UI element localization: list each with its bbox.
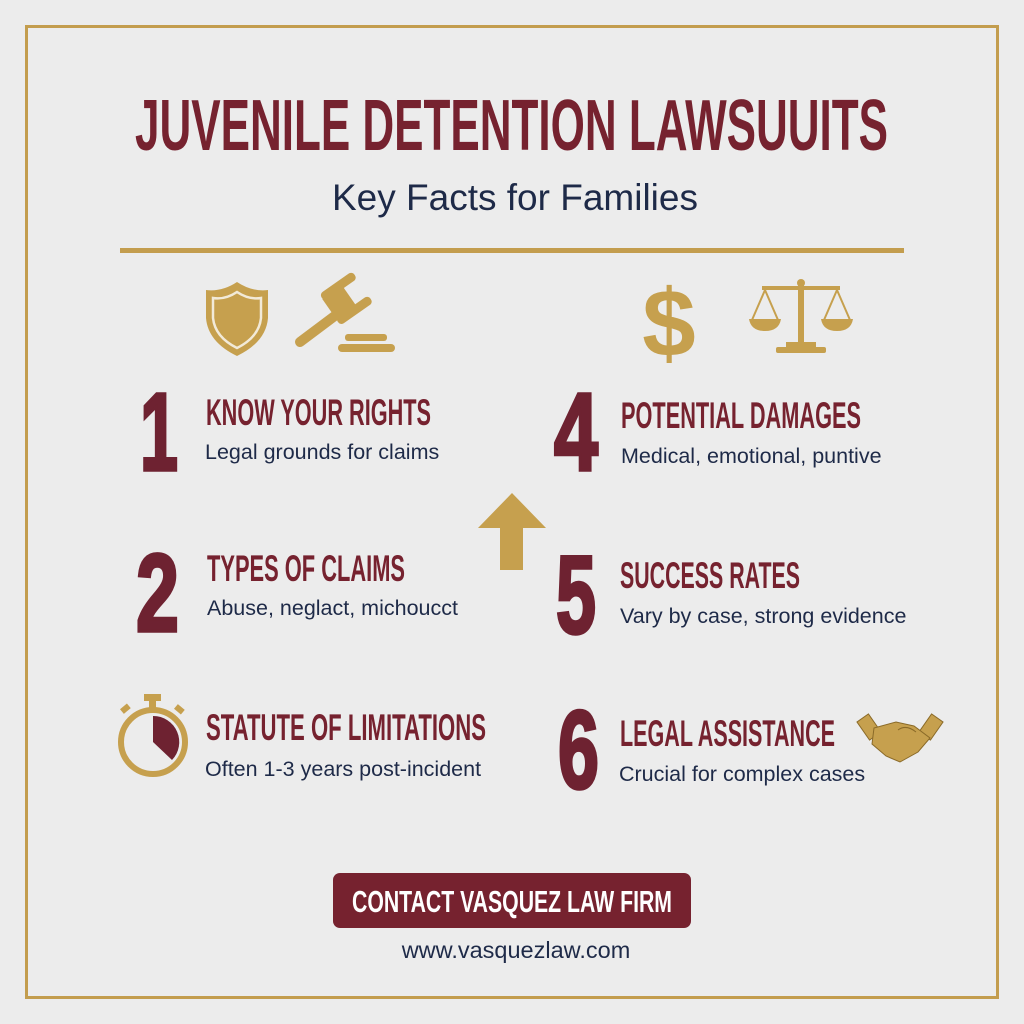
- item 6: 6: [558, 689, 599, 812]
- item 2: TYPES OF CLAIMS: [207, 548, 405, 589]
- subtitle: Key Facts for Families: [332, 177, 698, 218]
- url: www.vasquezlaw.com: [401, 937, 630, 963]
- item 2: [136, 532, 458, 655]
- item 3: STATUTE OF LIMITATIONS: [206, 707, 486, 748]
- item 5: Vary by case, strong evidence: [620, 604, 906, 628]
- item 5: 5: [556, 534, 596, 657]
- item 5: SUCCESS RATES: [620, 555, 800, 596]
- item 5: [556, 534, 906, 657]
- item 4: 4: [554, 371, 598, 494]
- gold divider: [120, 248, 904, 253]
- item 4: POTENTIAL DAMAGES: [621, 395, 861, 436]
- item 6: [558, 689, 943, 812]
- button: contact: [333, 873, 691, 928]
- item 4: [554, 371, 882, 494]
- icon: gavel: [300, 271, 395, 352]
- icon: scales: [749, 279, 853, 353]
- icon: handshake: [857, 714, 943, 762]
- item 2: Abuse, neglact, michoucct: [207, 596, 458, 620]
- arrow: up: [478, 493, 546, 570]
- item 1: Legal grounds for claims: [205, 440, 439, 464]
- item 1: KNOW YOUR RIGHTS: [206, 392, 431, 433]
- item 6: Crucial for complex cases: [619, 762, 865, 786]
- icon: shield: [206, 282, 268, 356]
- icon: dollar: $: [642, 270, 696, 377]
- item 6: LEGAL ASSISTANCE: [620, 713, 835, 754]
- button: contact: CONTACT VASQUEZ LAW FIRM: [352, 884, 672, 919]
- item 3: [120, 694, 486, 781]
- item 3: Often 1-3 years post-incident: [205, 757, 481, 781]
- item 1: 1: [140, 371, 178, 494]
- item 2: 2: [136, 532, 179, 655]
- item 1: [140, 371, 439, 494]
- icon: stopwatch: [120, 694, 185, 774]
- item 4: Medical, emotional, puntive: [621, 444, 882, 468]
